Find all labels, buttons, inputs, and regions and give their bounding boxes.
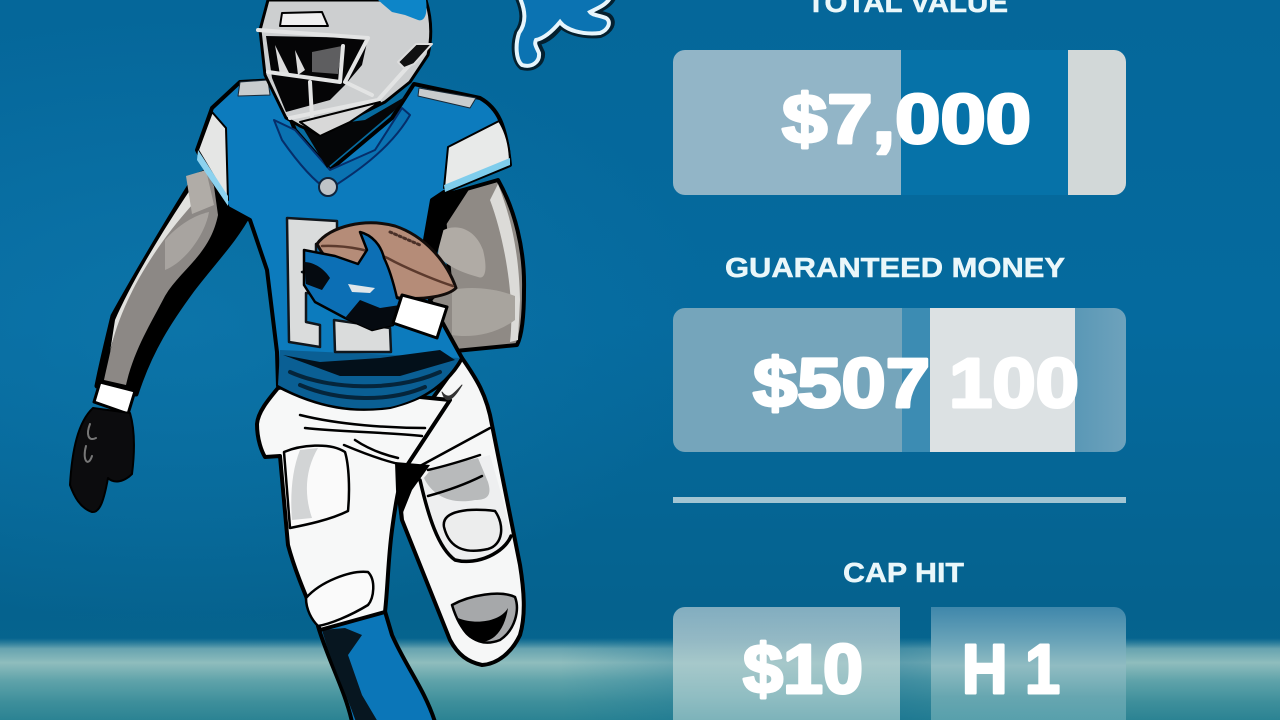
player left arm <box>97 165 250 394</box>
value: guaranteed money: $507 <box>753 344 930 422</box>
far leg sock <box>318 608 435 720</box>
helmet <box>258 0 432 136</box>
label: guaranteed money: GUARANTEED MONEY <box>725 252 1065 283</box>
pants folds <box>300 415 490 496</box>
divider <box>673 497 1126 503</box>
jersey hem folds <box>278 350 460 409</box>
lower knee pad <box>306 572 373 626</box>
helmet side vent and clip <box>398 44 432 68</box>
knee pad upper <box>418 455 511 561</box>
sock shadow <box>322 628 378 720</box>
thigh pad <box>284 446 349 528</box>
helmet stripe <box>378 0 427 20</box>
near leg pants <box>257 385 450 630</box>
visor opening <box>266 36 368 112</box>
chin cup <box>300 102 380 136</box>
shoulder name plates <box>238 80 476 108</box>
jersey collar <box>274 108 410 190</box>
player jersey <box>197 80 510 409</box>
facemask bars <box>258 30 412 118</box>
value: guaranteed money second part: 100 <box>949 344 1079 422</box>
value: cap hit right: H 1 <box>962 630 1060 708</box>
value: cap hit left: $10 <box>743 630 863 708</box>
player left wristband and glove <box>70 382 135 512</box>
far leg pants <box>395 358 524 665</box>
helmet vent <box>280 12 328 26</box>
lion logo <box>516 0 612 67</box>
panel: guaranteed money <box>673 308 1126 452</box>
player legs <box>257 358 524 720</box>
value: total value: $7,000 <box>782 80 1031 158</box>
player illustration <box>70 0 524 720</box>
knee pad lower <box>452 594 517 643</box>
panel: total value <box>673 50 1126 195</box>
right sleeve stripes <box>444 121 510 188</box>
collar logo <box>319 178 337 196</box>
football <box>317 223 456 299</box>
left sleeve stripes <box>198 112 228 200</box>
label: cap hit: CAP HIT <box>843 557 964 588</box>
player right glove and wristband <box>304 232 447 338</box>
jersey number <box>287 218 391 352</box>
crotch shadow <box>395 462 430 520</box>
logo swoosh on pants <box>442 385 462 400</box>
visor reflection <box>312 46 342 74</box>
player right arm <box>425 180 524 352</box>
panel: cap hit <box>673 607 1126 720</box>
neck shadow <box>303 95 408 168</box>
